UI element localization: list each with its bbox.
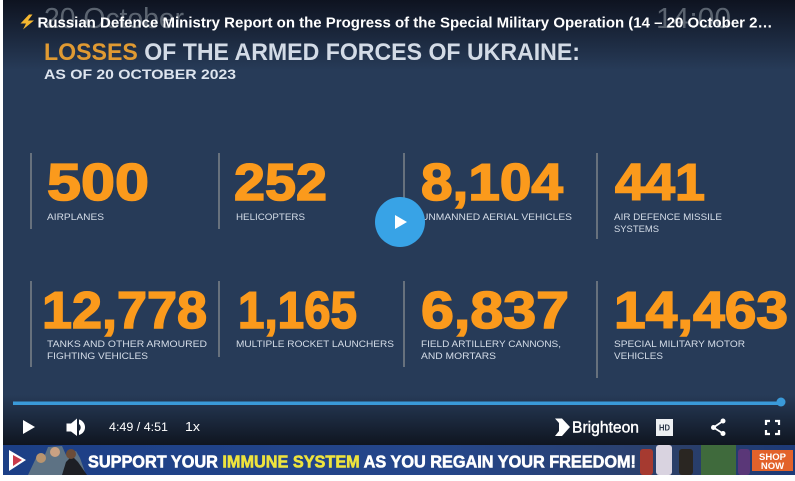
stat: helicopters [218, 153, 327, 229]
stat: airplanes [30, 153, 149, 229]
video controls [23, 418, 779, 436]
stat: air defence missile systems: SYSTEMS [614, 224, 659, 235]
stat: multiple rocket launchers: 1,165 [238, 282, 357, 340]
time counter: 4:49 / 4:51 [109, 422, 168, 434]
stat: field artillery [403, 281, 569, 367]
icon: fullscreen [766, 421, 779, 434]
banner headline: SUPPORT YOUR IMMUNE SYSTEM AS YOU REGAIN YOUR FREEDOM! [88, 452, 636, 472]
stat: tanks: FIGHTING VEHICLES [47, 351, 148, 362]
icon: share [711, 418, 726, 436]
stat: field artillery: AND MORTARS [421, 351, 496, 362]
shop now button: NOW [761, 461, 784, 472]
stat: multiple rocket launchers: MULTIPLE ROCKET LAUNCHERS [236, 339, 394, 350]
play button overlay [375, 197, 425, 247]
stat: unmanned aerial vehicles: UNMANNED AERIAL VEHICLES [421, 212, 572, 223]
stat: special military motor vehicles: VEHICLES [614, 351, 663, 362]
video title bar: Russian Defence Ministry Report on the Progress of the Special Military Operation (14 – 20 October 2… [38, 16, 773, 32]
stat: airplanes: 500 [47, 154, 149, 212]
heading [44, 39, 580, 82]
subheading: AS OF 20 OCTOBER 2023 [44, 66, 236, 82]
stat: special military motor vehicles: 14,463 [614, 282, 788, 340]
stat: multiple rocket launchers [218, 281, 394, 357]
stat: unmanned aerial vehicles [403, 153, 572, 229]
banner products [640, 445, 750, 475]
stat: tanks [30, 281, 207, 367]
stat: tanks: TANKS AND OTHER ARMOURED [47, 339, 207, 350]
stat: special military motor vehicles: SPECIAL MILITARY MOTOR [614, 339, 745, 350]
HD badge [656, 419, 673, 436]
stat: air defence missile systems: 441 [615, 154, 705, 212]
brighteon logo: Brighteon [572, 420, 639, 436]
faded slide date and time [44, 3, 731, 35]
icon: play [23, 420, 35, 434]
stat: special military motor vehicles [596, 281, 788, 378]
icon: volume [66, 418, 85, 436]
stat: field artillery: FIELD ARTILLERY CANNONS, [421, 339, 561, 350]
shop now button: SHOP [759, 452, 787, 463]
banner people [28, 446, 87, 475]
faded slide date and time: 14:00 [656, 3, 731, 35]
stat: air defence missile systems: AIR DEFENCE MISSILE [614, 212, 722, 223]
faded slide date and time: 20 October [44, 3, 184, 35]
stat: tanks: 12,778 [42, 282, 207, 340]
stat: airplanes: AIRPLANES [47, 212, 104, 223]
advertisement banner [3, 445, 795, 475]
banner logo [9, 450, 26, 471]
stat: air defence missile systems [596, 153, 722, 239]
shop now button [752, 450, 793, 472]
stat: helicopters: 252 [234, 154, 327, 212]
progress bar [13, 398, 786, 406]
playback speed: 1x [185, 419, 201, 434]
HD badge: HD [659, 424, 670, 432]
stat: unmanned aerial vehicles: 8,104 [421, 154, 563, 212]
heading: LOSSES OF THE ARMED FORCES OF UKRAINE: [44, 39, 580, 66]
stat: helicopters: HELICOPTERS [236, 212, 305, 223]
stat: field artillery: 6,837 [421, 282, 569, 340]
icon: lightning bolt [20, 14, 34, 30]
